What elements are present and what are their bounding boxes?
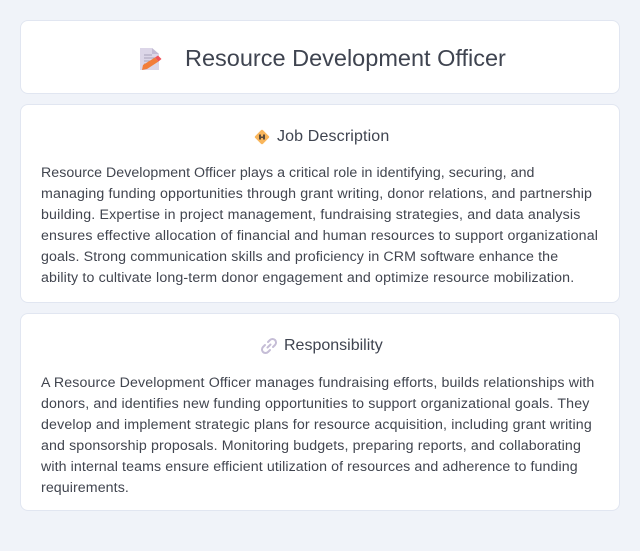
text block: responsibility: and sponsorship proposals. Monitoring budgets, preparing reports, and collaborating (41, 438, 581, 454)
text block: responsibility: develop and implement strategic plans for resource acquisition, including grant writing (41, 417, 592, 433)
heading: responsibility: Responsibility (284, 337, 383, 354)
text block: job description: ensures effective allocation of financial and human resources to support organizational (41, 228, 598, 244)
icon: orange diamond (254, 130, 270, 144)
text block: job description: ability to cultivate long-term donor engagement and optimize resource mobilization. (41, 270, 574, 286)
text block: job description: managing funding opportunities through grant writing, donor relations, and partnership (41, 186, 592, 202)
icon: chain link (261, 338, 277, 354)
title: Resource Development Officer (185, 45, 506, 71)
text block: responsibility (41, 375, 594, 496)
text block: responsibility: donors, and identifies new funding opportunities to support organizational goals. They (41, 396, 589, 412)
icon: document with pencil (140, 48, 162, 70)
text block: job description: Resource Development Officer plays a critical role in identifying, securing, and (41, 165, 534, 181)
text block: responsibility: with internal teams ensure efficient utilization of resources and adherence to funding (41, 459, 578, 475)
text block: job description: building. Expertise in project management, fundraising strategies, and data analysis (41, 207, 581, 223)
text block: responsibility: A Resource Development Officer manages fundraising efforts, builds relationships with (41, 375, 594, 391)
text block: job description: goals. Strong communication skills and proficiency in CRM software enhance the (41, 249, 558, 265)
panel: job description (20, 104, 620, 303)
panel: responsibility (20, 313, 620, 511)
panel: title card (20, 20, 620, 94)
text block: responsibility: requirements. (41, 480, 129, 496)
heading: job description: Job Description (277, 128, 389, 145)
text block: job description (41, 165, 598, 286)
